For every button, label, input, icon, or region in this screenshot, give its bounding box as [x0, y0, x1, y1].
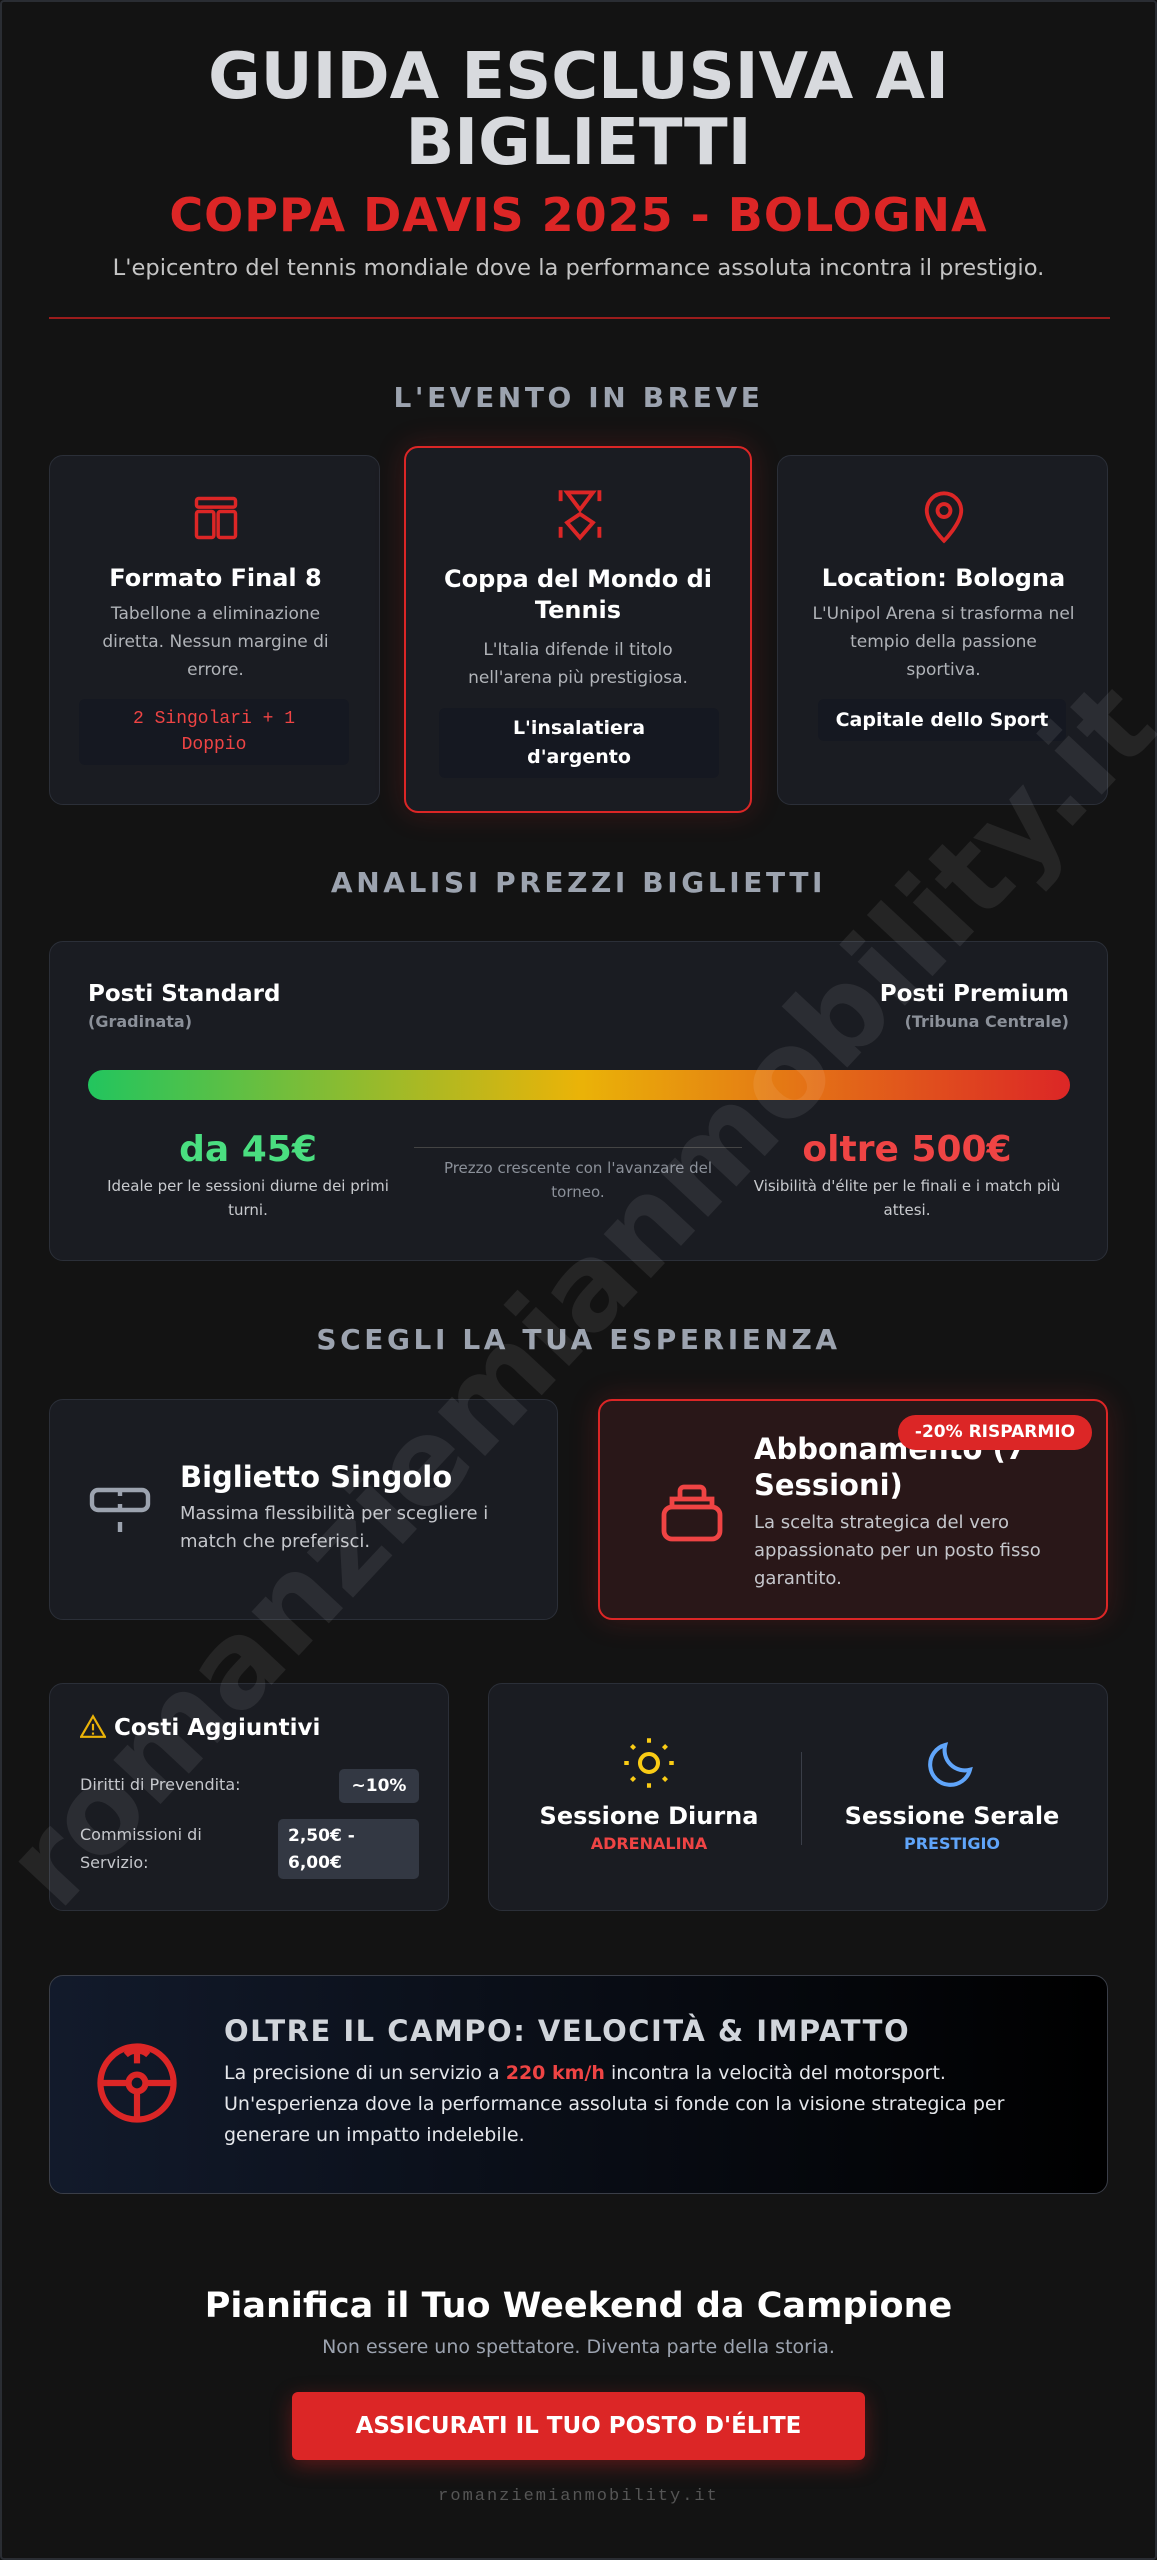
- session: diurna: ADRENALINA: [591, 1834, 707, 1853]
- title: BIGLIETTI: [405, 106, 752, 180]
- price high: Visibilità d'élite per le finali e i match più attesi.: [754, 1177, 1060, 1219]
- price high: [754, 1129, 1060, 1219]
- panel: costi aggiuntivi: 2,50€ -: [288, 1826, 355, 1846]
- label: standard: [88, 981, 280, 1031]
- row: commissioni: [80, 1825, 202, 1872]
- icon: layout: [194, 496, 238, 540]
- badge: [898, 1415, 1092, 1450]
- gradient bar: [88, 1070, 1070, 1100]
- text: tempio della passione: [850, 632, 1037, 652]
- text: Coppa del Mondo di: [444, 565, 712, 593]
- tag: Capitale dello Sport: [836, 709, 1048, 731]
- icon: trophy: [558, 490, 602, 540]
- CTA button: ASSICURATI IL TUO POSTO D'ÉLITE: [356, 2413, 801, 2439]
- text: Tabellone a eliminazione diretta. Nessun margine di errore.: [102, 604, 329, 680]
- label: premium: (Tribuna Centrale): [905, 1012, 1069, 1031]
- text: OLTRE IL CAMPO: VELOCITÀ & IMPATTO: [224, 2014, 910, 2048]
- card: location: [777, 455, 1108, 805]
- text: [224, 2014, 1004, 2146]
- text: La precisione di un servizio a 220 km/h incontra la velocità del motorsport.: [224, 2062, 946, 2084]
- title: [208, 40, 949, 180]
- text: Location: Bologna: [822, 564, 1065, 592]
- panel: oltre il campo: [49, 1975, 1108, 2194]
- text: Tennis: [535, 596, 621, 624]
- text: Abbonamento (7 Sessioni): [754, 1432, 1026, 1502]
- text: Un'esperienza dove la performance assoluta si fonde con la visione strategica per generare un impatto indelebile.: [224, 2093, 1004, 2146]
- panel: prices: [49, 941, 1108, 1261]
- label: premium: Posti Premium: [880, 981, 1069, 1007]
- text: Formato Final 8: [109, 564, 322, 592]
- heading: evento in breve: L'EVENTO IN BREVE: [393, 381, 764, 414]
- CTA button: [292, 2392, 865, 2460]
- text: [180, 1460, 488, 1552]
- tag: L'insalatiera: [513, 717, 645, 739]
- tag: Doppio: [182, 735, 246, 755]
- row: commissioni: Commissioni di: [80, 1825, 202, 1844]
- CTA heading: Pianifica il Tuo Weekend da Campione: [205, 2286, 952, 2326]
- label: standard: Posti Standard: [88, 981, 280, 1007]
- middle note: Prezzo crescente con l'avanzare del torneo.: [444, 1159, 712, 1201]
- text: L'Italia difende il titolo nell'arena più prestigiosa.: [468, 640, 688, 688]
- price low: da 45€: [179, 1129, 317, 1170]
- card: biglietto singolo: [49, 1399, 558, 1620]
- text: Massima flessibilità per scegliere i match che preferisci.: [180, 1503, 488, 1552]
- session: diurna: Sessione Diurna: [540, 1802, 758, 1830]
- session: serale: Sessione Serale: [845, 1802, 1059, 1830]
- session: serale: PRESTIGIO: [904, 1834, 1000, 1853]
- text: L'Unipol Arena si trasforma nel: [812, 604, 1075, 624]
- middle note: [414, 1147, 742, 1204]
- card: coppa: [404, 446, 752, 813]
- card: formato: [49, 455, 380, 805]
- label: standard: (Gradinata): [88, 1012, 192, 1031]
- tag: [439, 708, 719, 778]
- label: premium: [880, 981, 1069, 1031]
- panel: costi aggiuntivi: ~10%: [352, 1776, 406, 1796]
- text: [812, 564, 1075, 680]
- text: Biglietto Singolo: [180, 1460, 452, 1494]
- row: prevendita: Diritti di Prevendita:: [80, 1775, 241, 1794]
- text: [102, 564, 329, 680]
- price low: [107, 1129, 389, 1219]
- panel: costi aggiuntivi: 6,00€: [288, 1853, 342, 1873]
- heading: scegli: SCEGLI LA TUA ESPERIENZA: [316, 1323, 841, 1356]
- icon: steering wheel: [97, 2043, 177, 2123]
- icon: stack: [662, 1484, 722, 1542]
- price high: oltre 500€: [802, 1129, 1012, 1170]
- tag: [818, 699, 1066, 741]
- badge: -20% RISPARMIO: [915, 1422, 1075, 1442]
- text: [754, 1432, 1041, 1589]
- price low: Ideale per le sessioni diurne dei primi turni.: [107, 1177, 389, 1219]
- text: La scelta strategica del vero appassionato per un posto fisso garantito.: [754, 1512, 1041, 1589]
- subtitle: COPPA DAVIS 2025 - BOLOGNA: [169, 188, 988, 242]
- session: serale: [845, 1742, 1059, 1853]
- heading with warning icon: Costi Aggiuntivi: [114, 1715, 320, 1741]
- heading: analisi prezzi: ANALISI PREZZI BIGLIETTI: [331, 866, 826, 899]
- tag: 2 Singolari + 1: [133, 709, 295, 729]
- tagline: L'epicentro del tennis mondiale dove la performance assoluta incontra il prestigio.: [113, 255, 1044, 281]
- icon: ticket: [90, 1488, 150, 1532]
- text: sportiva.: [906, 660, 981, 680]
- footer url: romanziemianmobility.it: [438, 2487, 719, 2506]
- panel: costi aggiuntivi: [49, 1683, 449, 1911]
- panel: sessioni: [488, 1683, 1108, 1911]
- tag: d'argento: [527, 746, 631, 768]
- session: diurna: [540, 1738, 758, 1853]
- icon: pin: [924, 491, 964, 544]
- text: [444, 565, 712, 688]
- row: commissioni: Servizio:: [80, 1853, 149, 1872]
- title: GUIDA ESCLUSIVA AI: [208, 40, 949, 114]
- CTA subtitle: Non essere uno spettatore. Diventa parte della storia.: [322, 2336, 835, 2358]
- tag: [79, 699, 349, 765]
- card: abbonamento: [598, 1399, 1108, 1620]
